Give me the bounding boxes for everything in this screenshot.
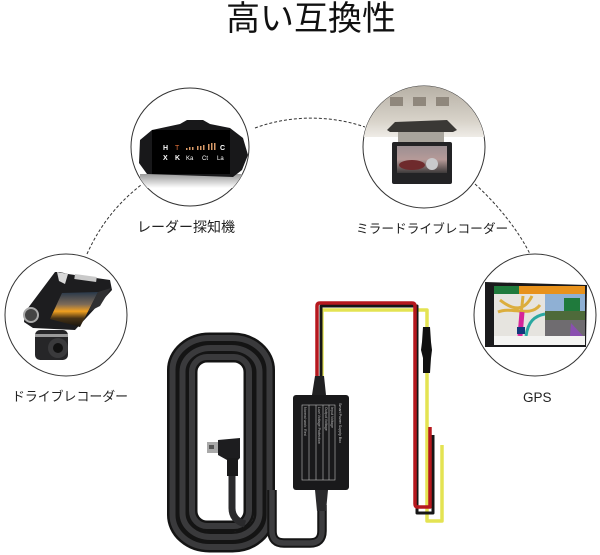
inline fuse holder: [421, 327, 432, 373]
smart power supply box: Smart Power Supply Box: [338, 403, 342, 443]
icon: radar detector: C: [220, 145, 225, 152]
label: dash cam: ドライブレコーダー: [12, 389, 128, 404]
label: GPS: GPS: [523, 390, 552, 405]
power box strain reliefs: [312, 376, 326, 395]
panel: mirror recorder circle: [360, 84, 488, 208]
icon: radar detector: La: [217, 156, 224, 162]
smart power supply box: Input Voltage: [330, 407, 334, 428]
label: mirror recorder: ミラードライブレコーダー: [356, 221, 508, 236]
panel: GPS circle: [474, 254, 596, 376]
icon: radar detector: Ct: [202, 156, 208, 162]
wires: [317, 303, 442, 521]
title: 高い互換性: [226, 0, 396, 38]
icon: mirror recorder: [360, 84, 488, 184]
mini USB plug: [207, 438, 240, 476]
panel: radar detector circle: [131, 88, 249, 206]
icon: radar detector: [139, 120, 248, 188]
smart power supply box: Output Voltage: [324, 407, 328, 431]
smart power supply box: [293, 395, 349, 490]
smart power supply box: Low Voltage Protection: [317, 407, 321, 444]
icon: radar detector: X: [163, 155, 168, 162]
icon: GPS navigator: [485, 282, 587, 347]
coiled black cable: [172, 338, 322, 547]
icon: radar detector: H: [163, 145, 168, 152]
label: radar detector: レーダー探知機: [137, 219, 235, 235]
dashed connector arcs: [87, 118, 530, 254]
icon: dash cam: [24, 272, 112, 360]
panel: hardwire kit: [172, 303, 442, 547]
smart power supply box: Normal work: Red: [303, 407, 307, 436]
icon: radar detector: T: [175, 145, 180, 152]
panel: dash cam circle: [5, 254, 127, 376]
icon: radar detector: Ka: [186, 156, 194, 162]
icon: radar detector: K: [175, 155, 180, 162]
